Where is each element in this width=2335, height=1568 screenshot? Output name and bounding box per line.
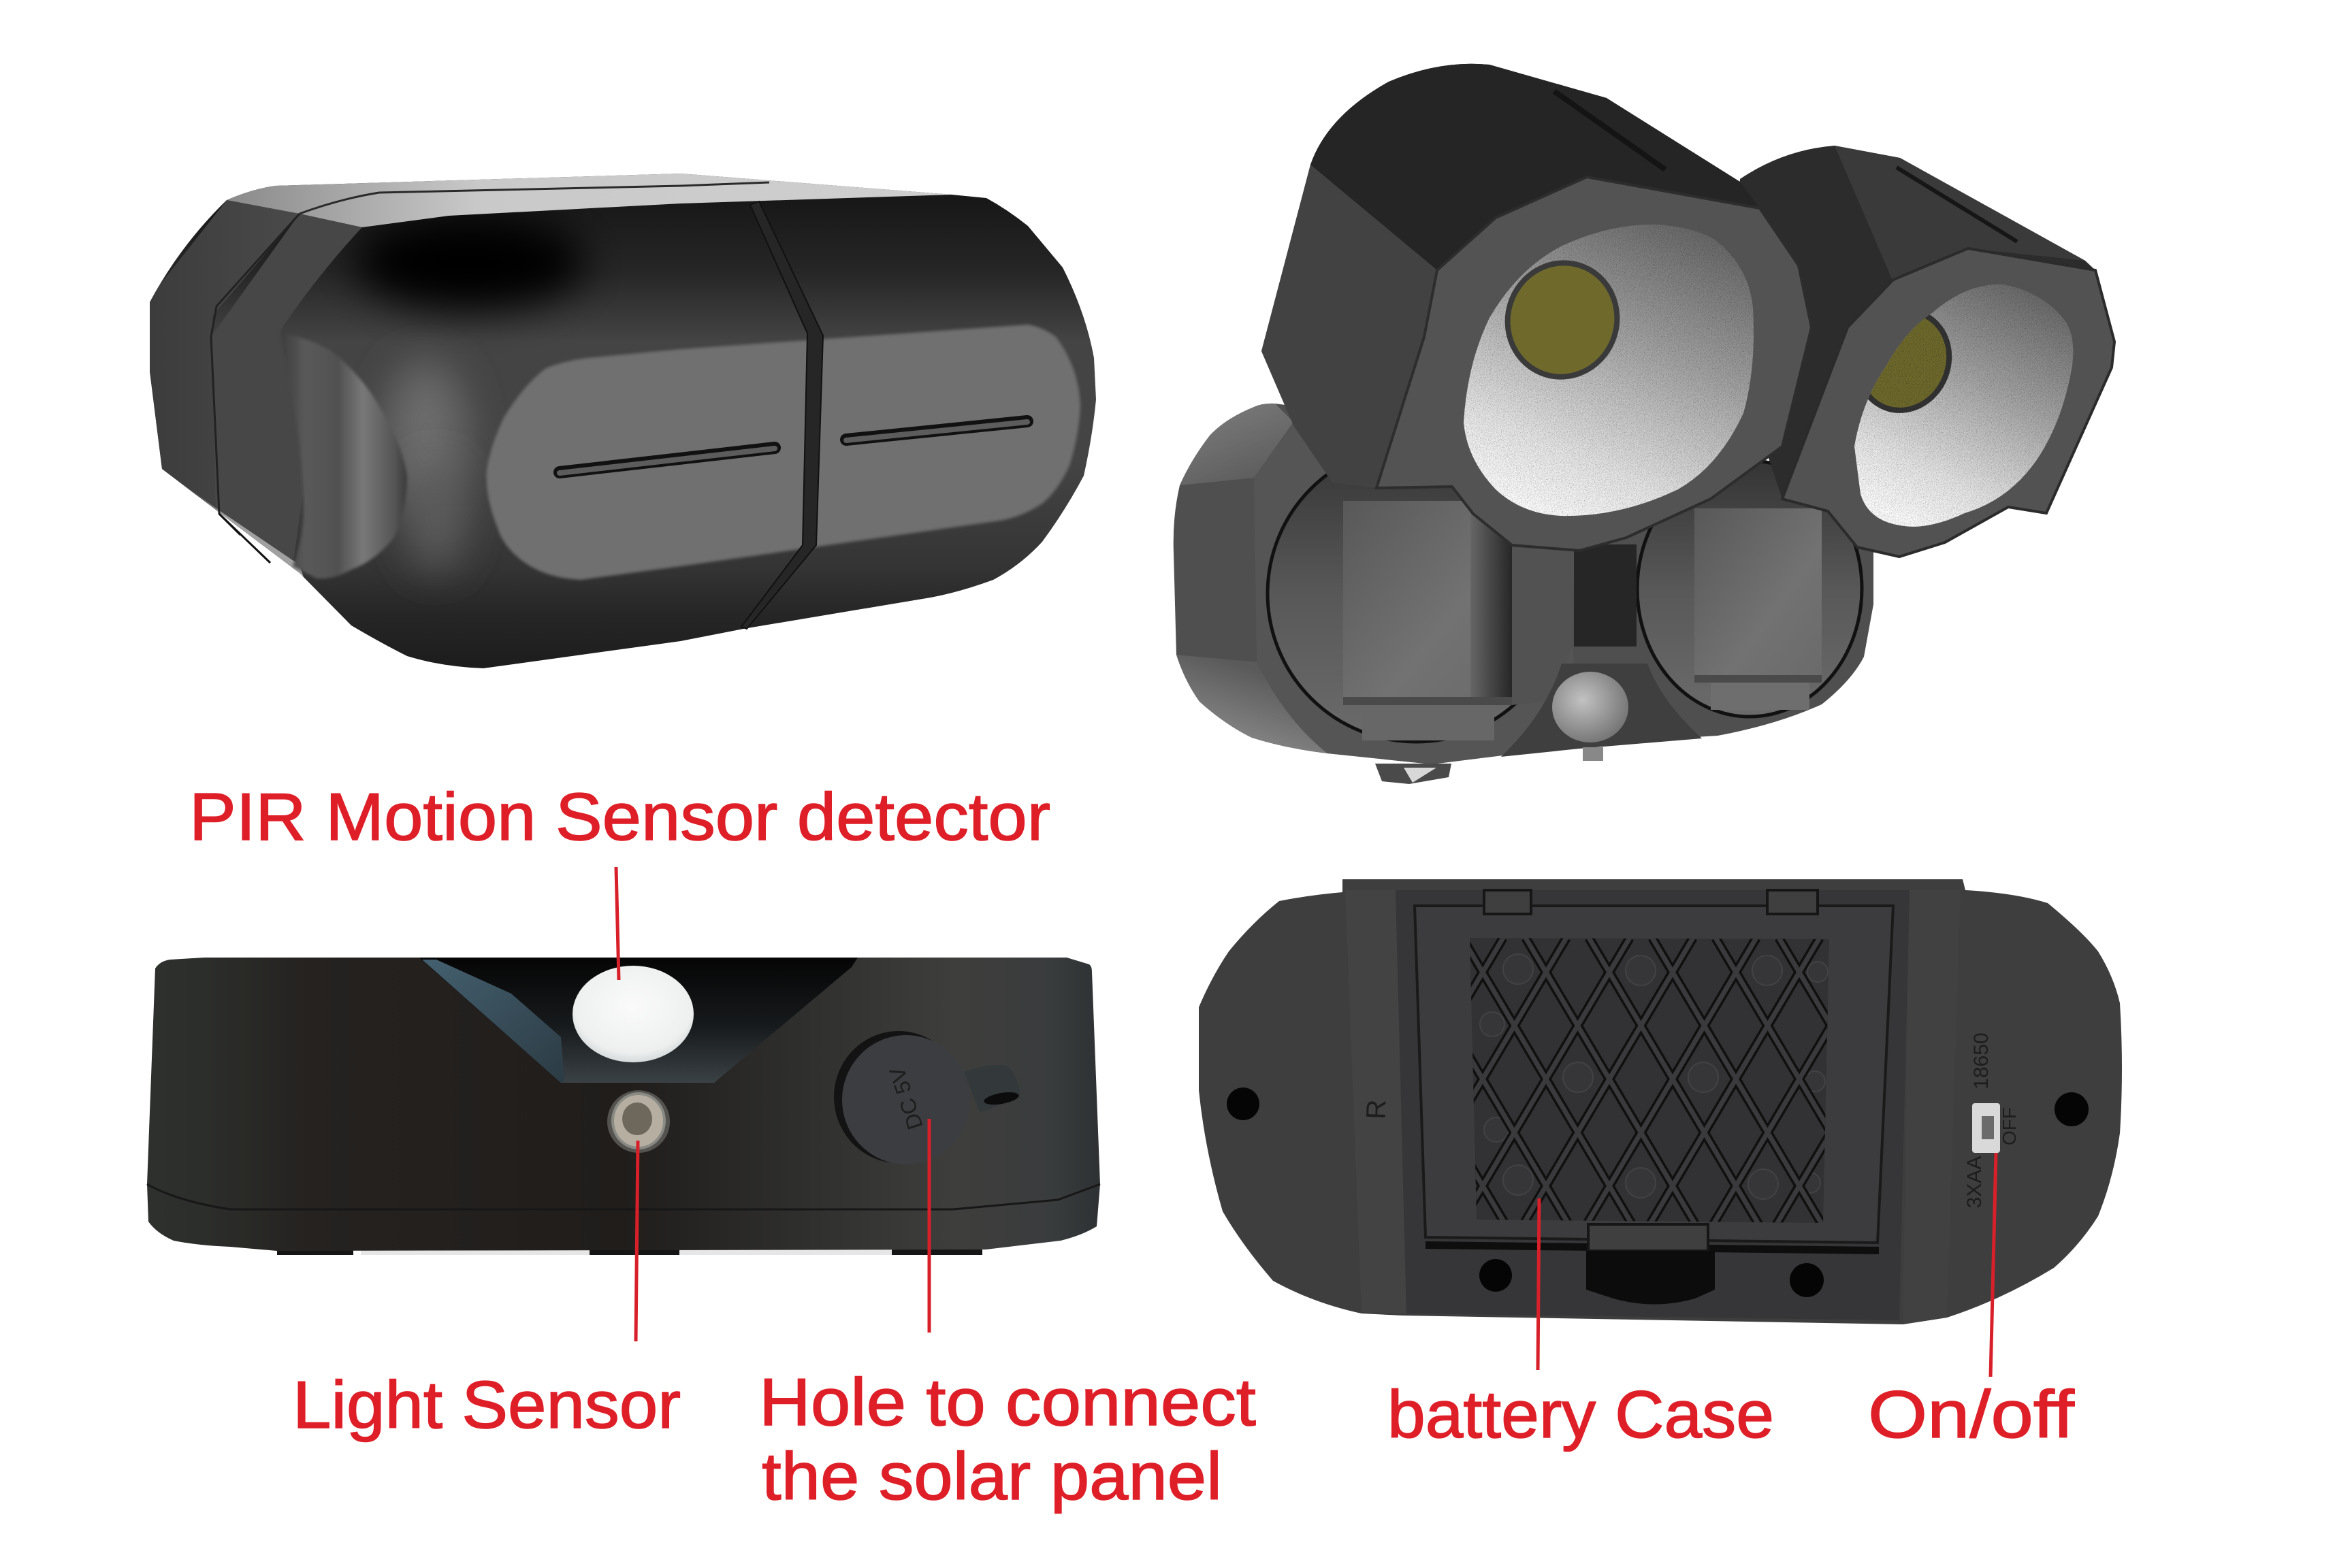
rear LED — [1868, 314, 1952, 413]
lower facet — [1176, 655, 1327, 753]
left seam — [211, 214, 300, 535]
mounting holes — [1227, 1088, 2089, 1297]
rear head faceplate — [1782, 248, 2114, 557]
vent slot left — [560, 448, 775, 473]
front head body — [1261, 64, 1760, 488]
dimples — [1480, 954, 1828, 1199]
second facet — [211, 214, 362, 566]
leader line: PIR sensor — [616, 867, 619, 980]
left cavity — [1343, 501, 1512, 740]
recess — [1396, 890, 1910, 1320]
right battery bay — [1637, 461, 1862, 717]
sensor recess — [419, 958, 858, 1083]
on/off switch: 18650 — [1970, 1032, 1993, 1090]
upper facet — [1180, 404, 1293, 485]
rear head body — [1729, 146, 2114, 499]
front head faceplate — [1376, 177, 1811, 551]
panel: closed light, rear view — [136, 163, 1110, 681]
light sensor — [607, 1090, 670, 1153]
door latch — [1586, 1251, 1715, 1304]
label: Hole to connect the solar panel: the solar panel — [762, 1439, 1222, 1514]
label: PIR Motion Sensor detector: PIR Motion Sensor detector — [189, 779, 1050, 854]
device body — [136, 163, 1110, 681]
top surface highlight — [227, 174, 952, 227]
blue wedge — [422, 960, 564, 1083]
label: Hole to connect the solar panel — [759, 1365, 1256, 1514]
label: Light Sensor: Light Sensor — [293, 1367, 681, 1442]
DC port cap: DC 5V — [884, 1064, 928, 1132]
battery door — [1415, 906, 1893, 1243]
rear reflector — [1854, 284, 2073, 527]
on/off switch — [1963, 1032, 2020, 1208]
label: battery Case: battery Case — [1387, 1377, 1774, 1452]
vent slot right — [846, 421, 1027, 440]
centre column — [1574, 544, 1637, 647]
front panel — [487, 325, 1080, 580]
sensor mount — [1501, 664, 1702, 757]
lower facet — [162, 469, 306, 585]
left battery bay — [1268, 445, 1564, 742]
body seam — [147, 1184, 1100, 1209]
rear lamp head — [1729, 146, 2114, 557]
top seam — [300, 182, 769, 214]
DC port cap — [834, 1031, 1020, 1164]
leader line: battery case — [1538, 1198, 1539, 1370]
panel: open light, front view — [1174, 64, 2114, 784]
panel: underside view — [147, 958, 1100, 1255]
front LED — [1493, 248, 1632, 391]
front head slot — [1554, 91, 1665, 169]
leader line: on/off switch — [1991, 1153, 1996, 1377]
right rail — [1903, 890, 1961, 1324]
front reflector — [1464, 225, 1754, 516]
leader line: solar panel port — [927, 1119, 931, 1333]
feet — [277, 1244, 982, 1255]
side crescent — [280, 333, 407, 578]
back plate — [1199, 879, 2122, 1324]
label: Hole to connect the solar panel: Hole to connect — [759, 1365, 1256, 1439]
rear head slot — [1897, 167, 2017, 242]
on/off switch: OFF — [1999, 1107, 2020, 1145]
door hinges — [1484, 890, 1818, 1251]
panel: rear battery cover view — [1199, 879, 2122, 1324]
PIR sensor dome — [573, 966, 694, 1062]
front lamp head — [1261, 64, 1811, 551]
centre band — [1512, 548, 1575, 705]
underside body — [147, 958, 1100, 1251]
PIR dome — [1552, 672, 1628, 742]
embossed R: R — [1362, 1099, 1391, 1120]
left rail — [1345, 890, 1406, 1313]
on/off switch: 3XAA — [1963, 1156, 1986, 1208]
base housing — [1174, 404, 1873, 784]
label: On/off: On/off — [1868, 1377, 2075, 1452]
left facet — [143, 200, 300, 514]
leader line: light sensor — [636, 1141, 638, 1341]
bottom connector — [1375, 764, 1451, 784]
ring — [1254, 422, 1579, 764]
right cavity — [1694, 508, 1822, 710]
centre seam band — [741, 201, 823, 629]
lattice grille — [1470, 938, 1829, 1223]
door bottom shadow — [1426, 1241, 1879, 1254]
